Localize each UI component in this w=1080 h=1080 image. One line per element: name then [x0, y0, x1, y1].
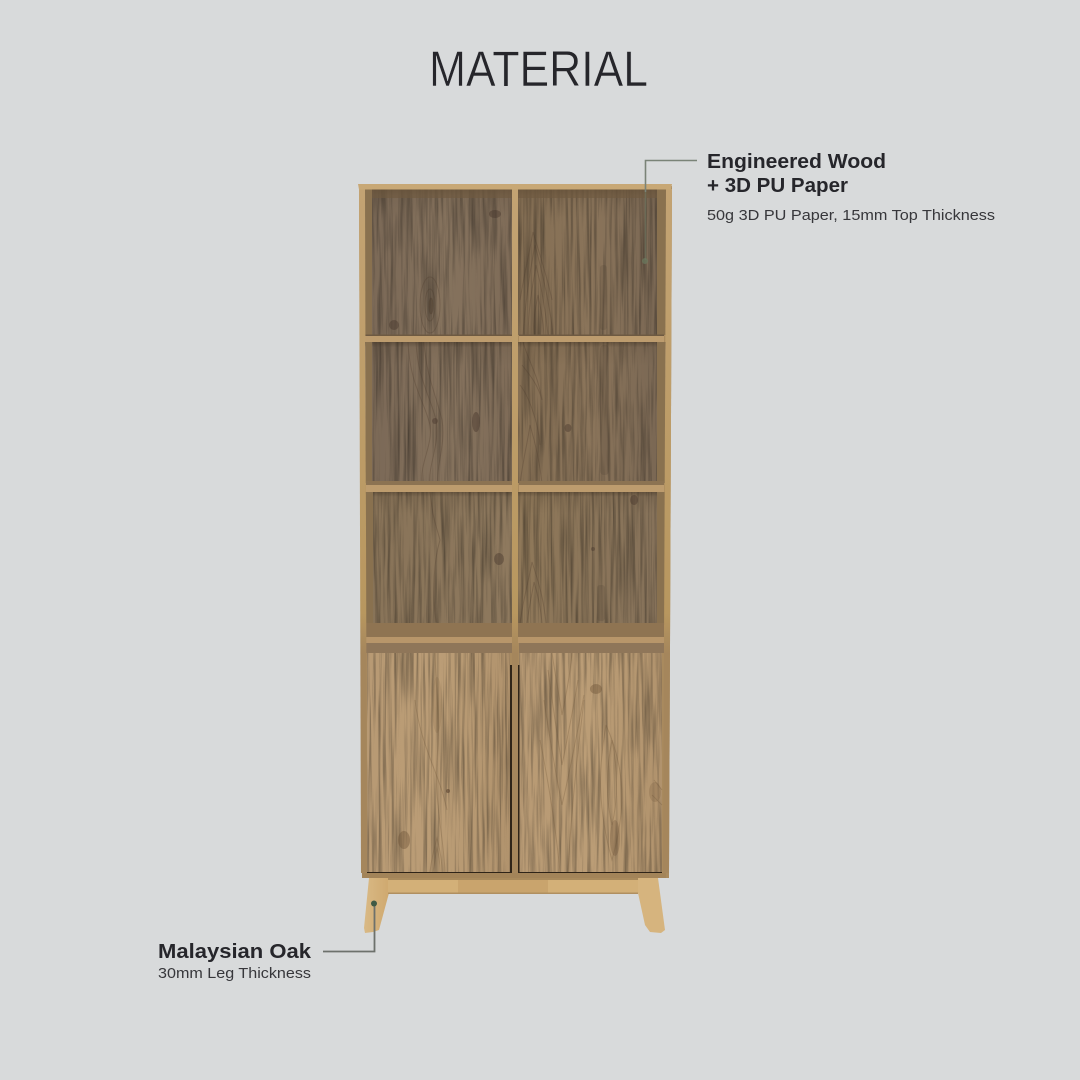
bookshelf illustration [358, 184, 672, 933]
shelf 2 [366, 481, 664, 492]
label heading [707, 151, 886, 197]
plinth rail [362, 873, 666, 878]
bottom shelf [366, 623, 664, 643]
callout: engineered wood [642, 151, 995, 264]
wood grain figures on back panels [408, 232, 553, 623]
label heading: Malaysian Oak [158, 941, 312, 963]
outer side panel: right [663, 189, 672, 873]
back panel: tier 3 left [365, 492, 512, 625]
back panel: tier 2 right [518, 342, 666, 483]
inner side walls [365, 189, 666, 624]
label heading: + 3D PU Paper [707, 175, 848, 197]
label detail: 50g 3D PU Paper, 15mm Top Thickness [707, 207, 995, 224]
interior shading [365, 189, 666, 514]
dark knots on back panels [389, 210, 638, 621]
callout: malaysian oak [158, 900, 377, 982]
back panel: tier 1 right [518, 189, 666, 335]
oak legs and rail [364, 878, 665, 933]
door gaps [367, 665, 662, 873]
door: right [519, 653, 662, 872]
back panel: tier 1 left [365, 189, 512, 335]
leader line: bottom [323, 900, 377, 952]
shelf 1 [365, 334, 664, 342]
cabinet carcass [359, 186, 672, 878]
centre divider [512, 189, 518, 873]
label detail: 30mm Leg Thickness [158, 965, 311, 982]
back panel: tier 3 right [518, 492, 666, 625]
outer side panel: left [359, 189, 367, 873]
title: MATERIAL [429, 41, 648, 97]
back panel: tier 2 left [365, 342, 512, 483]
door: left [367, 653, 510, 872]
label heading: Engineered Wood [707, 151, 886, 173]
recessed strip above doors [366, 643, 664, 653]
top board [358, 184, 672, 190]
leader line: top [642, 160, 697, 264]
